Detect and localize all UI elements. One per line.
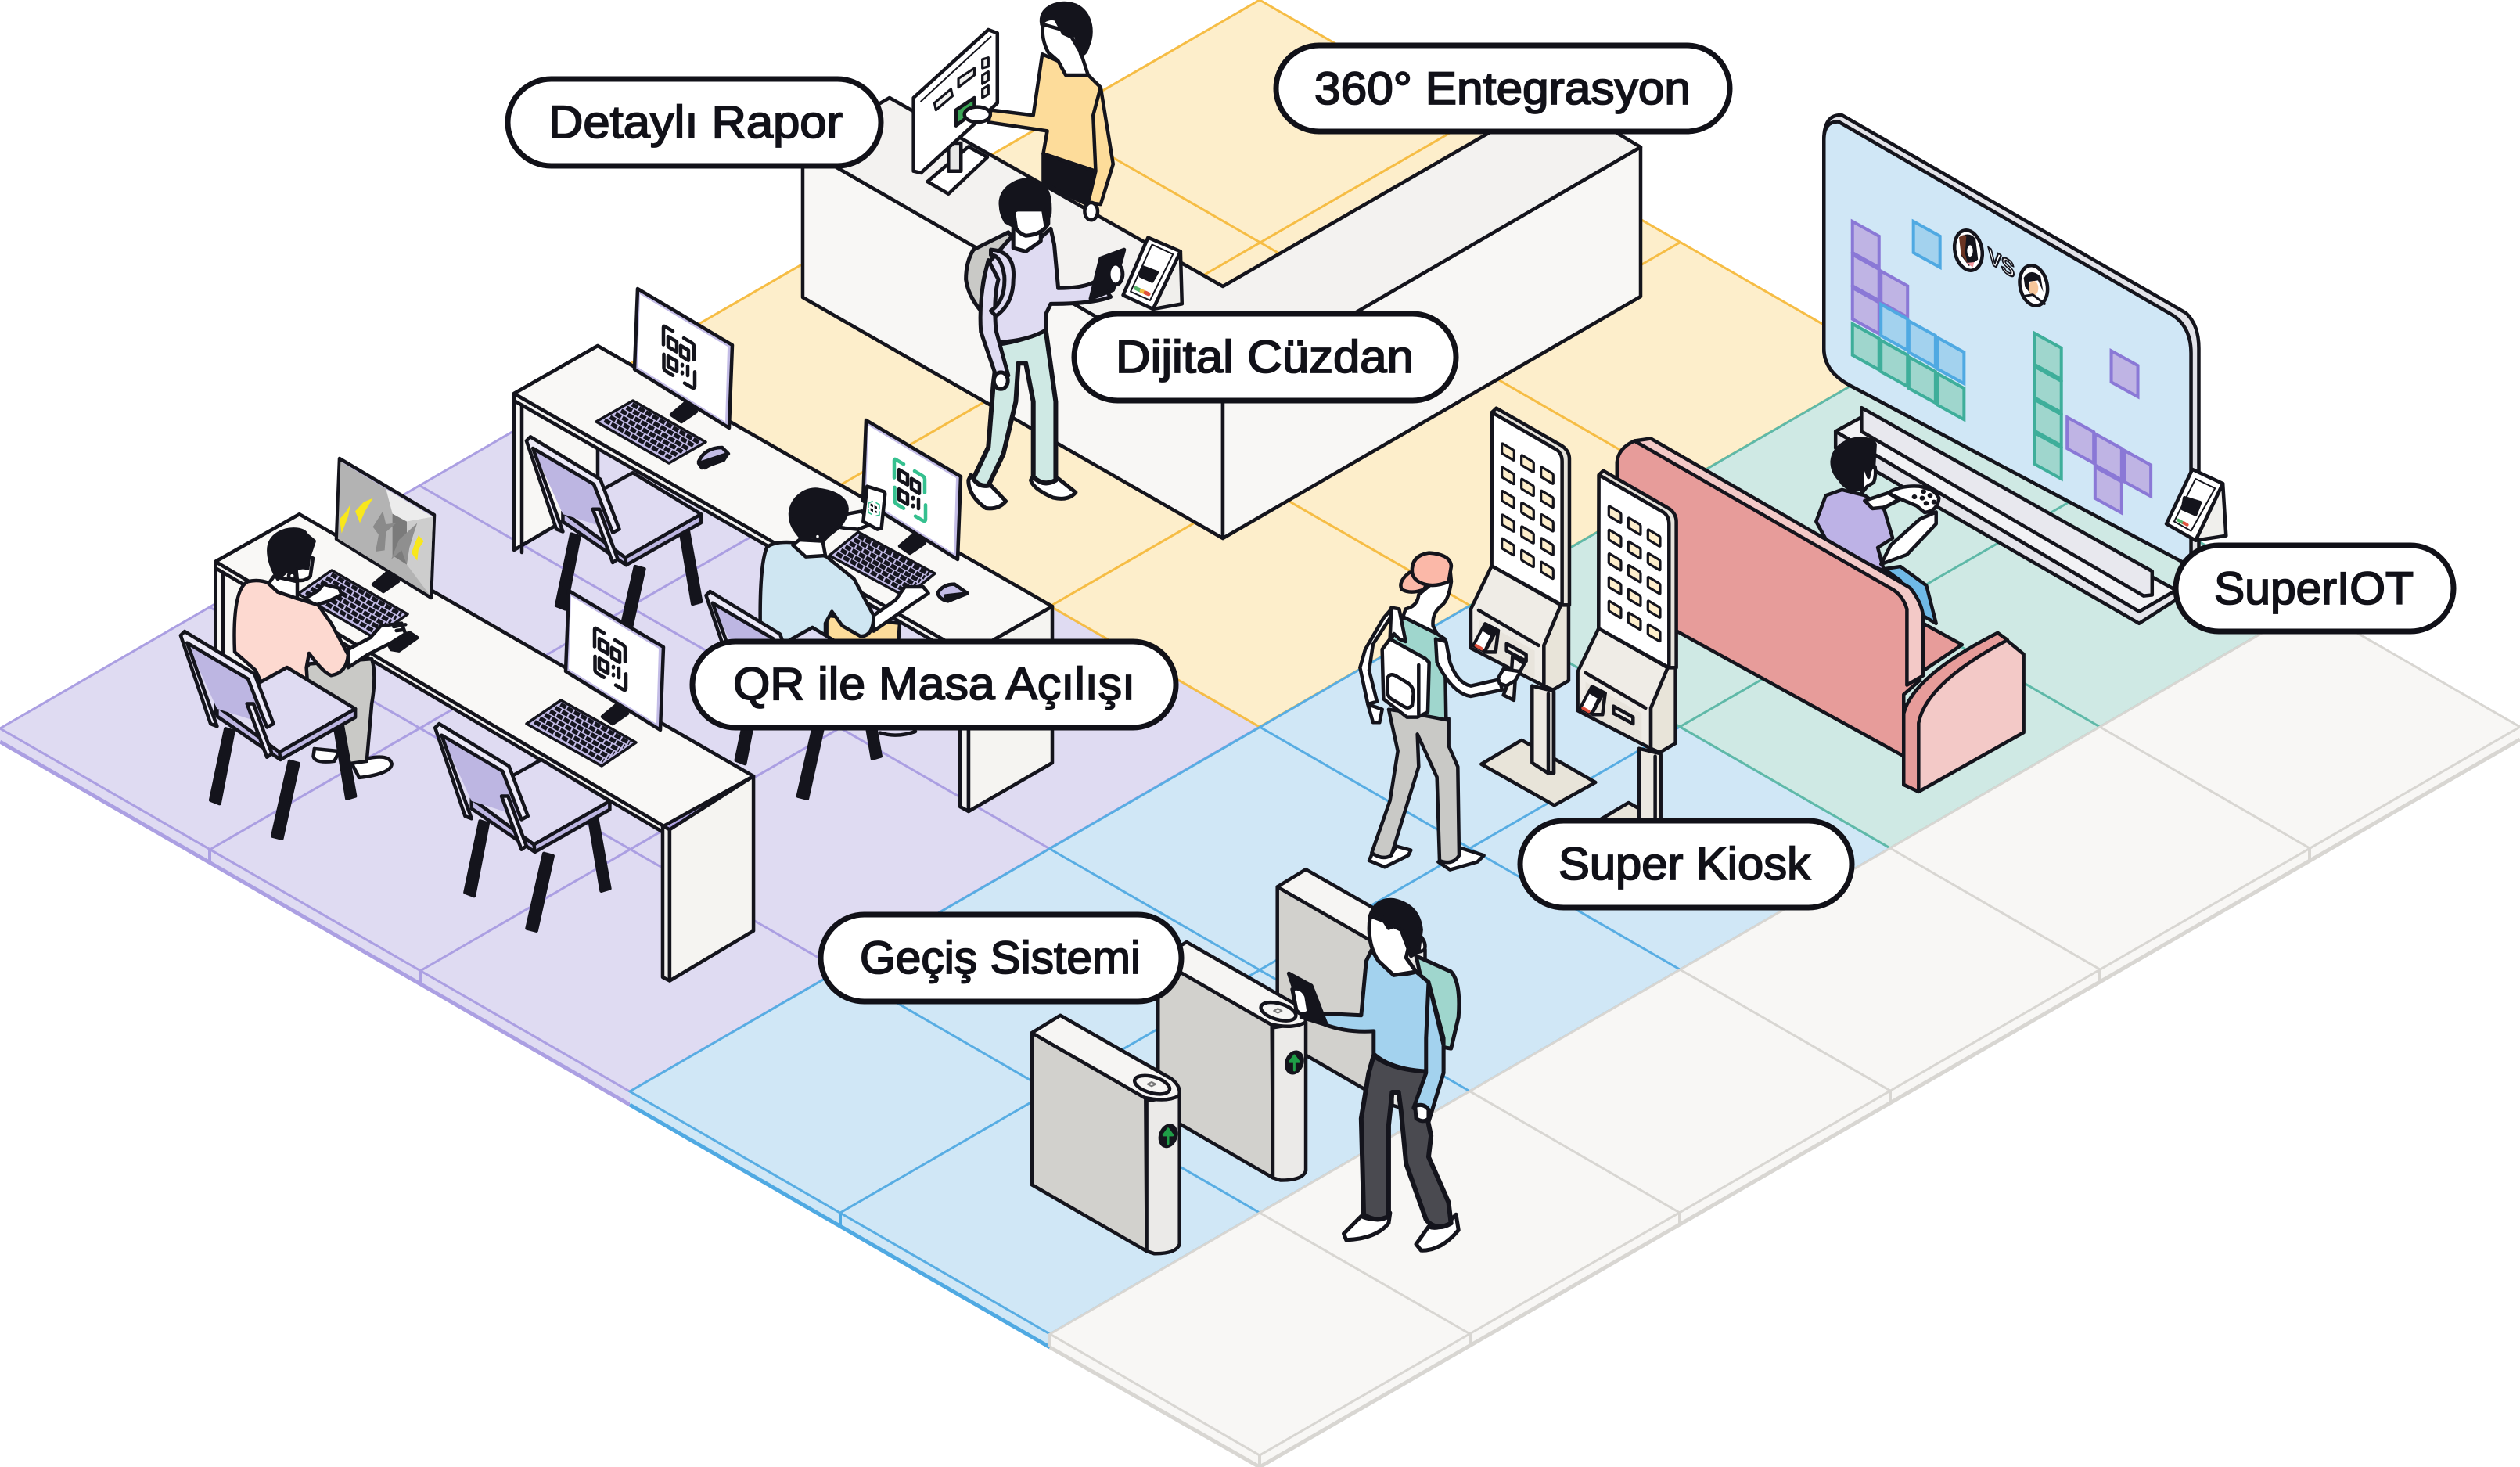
monitor with QR code, lower desk front bbox=[566, 591, 663, 730]
keyboard, lower desk back bbox=[298, 570, 417, 651]
tetris blocks bbox=[1853, 221, 2151, 513]
monitor showing game bbox=[336, 458, 434, 598]
player avatars bbox=[1951, 228, 2051, 308]
floor zone: gray bbox=[1050, 606, 2520, 1467]
floor zone: blue bbox=[630, 606, 1890, 1347]
floor zone: yellow bbox=[630, 0, 1890, 727]
chair behind QR label bbox=[706, 591, 881, 799]
seated gamer with controller bbox=[1816, 439, 1939, 624]
label: 360° Entegrasyon: 360° Entegrasyon bbox=[1314, 63, 1691, 114]
payment tablet on counter bbox=[1123, 238, 1182, 309]
floor zone: green bbox=[1470, 363, 2310, 848]
label: Geçiş Sistemi: Geçiş Sistemi bbox=[860, 933, 1141, 983]
label: Geçiş Sistemi bbox=[821, 915, 1181, 1001]
label: QR ile Masa Açılışı bbox=[692, 642, 1176, 728]
empty chair, lower desk bbox=[435, 724, 609, 931]
super kiosk left bbox=[1471, 408, 1595, 805]
turnstile gate back bbox=[1278, 869, 1425, 1108]
pink sofa bbox=[1617, 438, 2024, 792]
reception counter bbox=[803, 95, 1641, 538]
VS text on display: VS bbox=[1988, 243, 2015, 283]
turnstile gate front bbox=[1032, 1016, 1180, 1253]
label: Detaylı Rapor bbox=[508, 79, 881, 166]
keyboard and mouse, upper desk front bbox=[829, 532, 968, 601]
person at gate with phone bbox=[1289, 900, 1459, 1250]
label: Dijital Cüzdan: Dijital Cüzdan bbox=[1116, 332, 1414, 383]
upper desk bbox=[514, 346, 1052, 811]
super kiosk right bbox=[1578, 471, 1702, 868]
label: Dijital Cüzdan bbox=[1074, 314, 1456, 401]
label: SuperIOT: SuperIOT bbox=[2214, 563, 2414, 614]
seated person in pink shirt bbox=[235, 529, 405, 778]
staff person in yellow bbox=[988, 3, 1113, 220]
floor zone: purple bbox=[0, 364, 1260, 1105]
lower desk bbox=[216, 514, 753, 981]
keyboard and mouse, upper desk back bbox=[596, 401, 728, 468]
POS monitor on counter bbox=[914, 30, 998, 194]
all drawn objects bbox=[181, 3, 2226, 1253]
label: Detaylı Rapor: Detaylı Rapor bbox=[548, 97, 843, 148]
monitor with QR code, upper desk back bbox=[634, 289, 732, 428]
chair at upper desk left bbox=[527, 437, 701, 644]
turnstile gate middle bbox=[1158, 942, 1306, 1180]
label: Super Kiosk bbox=[1520, 821, 1852, 908]
chair with seated person bbox=[181, 631, 355, 839]
label: QR ile Masa Açılışı: QR ile Masa Açılışı bbox=[733, 659, 1135, 710]
tablet next to display bbox=[2166, 469, 2226, 541]
seated person in light blue scanning QR bbox=[760, 487, 929, 735]
keyboard, lower desk front bbox=[527, 700, 636, 766]
customer at kiosk with cap bbox=[1360, 553, 1524, 870]
label: Super Kiosk: Super Kiosk bbox=[1558, 839, 1811, 890]
label: 360° Entegrasyon bbox=[1276, 45, 1730, 131]
monitor with green QR code bbox=[863, 420, 961, 559]
game wall display bbox=[1824, 115, 2198, 624]
customer with backpack and phone bbox=[966, 180, 1124, 509]
label: SuperIOT bbox=[2176, 545, 2453, 631]
